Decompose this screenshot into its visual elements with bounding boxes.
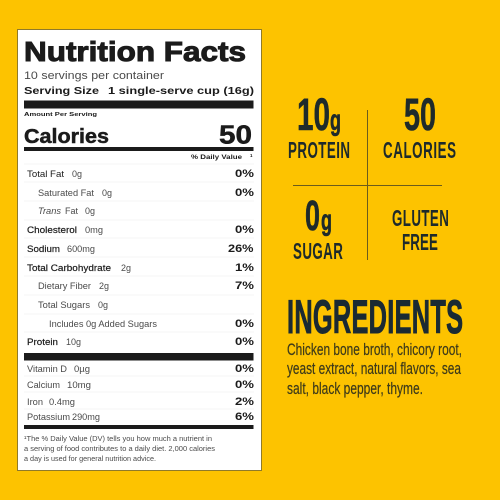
row: calcium: 0%: [235, 379, 254, 391]
footnote: a day is used for general nutrition advice.: [24, 456, 156, 463]
footnote: ¹The % Daily Value (DV) tells you how much a nutrient in: [24, 436, 212, 443]
stat: 10g protein: g: [330, 104, 341, 137]
row: protein: 10g: [66, 337, 81, 348]
row: iron: [27, 396, 254, 408]
stat: gluten free: FREE: [402, 229, 438, 255]
stat: 50 calories: [383, 89, 456, 163]
row: saturated fat: 0%: [235, 187, 254, 199]
row: cholesterol: [27, 224, 254, 236]
row: total carbohydrate: 1%: [235, 262, 254, 274]
row: total sugars: Total Sugars: [38, 300, 90, 311]
footnote: [24, 436, 216, 463]
row: added sugars: Includes 0g Added Sugars: [49, 319, 157, 330]
stat: 50 calories: 50: [404, 89, 436, 140]
row: saturated fat: 0g: [102, 188, 112, 199]
daily value header: % Daily Value: [191, 155, 243, 161]
stat: 0g sugar: g: [321, 204, 332, 237]
row: iron: 0.4mg: [49, 397, 75, 408]
stat: 0g sugar: 0: [305, 192, 320, 240]
row: total carbohydrate: [27, 262, 254, 274]
row: calcium: Calcium: [27, 380, 60, 391]
row: cholesterol: 0%: [235, 224, 254, 236]
calories row: 50: [219, 120, 252, 150]
stat: 10g protein: 10: [297, 89, 330, 140]
heading: ingredients: INGREDIENTS: [287, 292, 463, 344]
row: vitamin D: 0%: [235, 363, 254, 375]
row: calcium: [27, 379, 254, 391]
row: total fat: 0%: [235, 168, 254, 180]
row: saturated fat: [38, 187, 254, 199]
row: sodium: 600mg: [67, 244, 95, 255]
row: potassium: Potassium: [27, 412, 70, 423]
row: protein: Protein: [27, 337, 58, 348]
amount per serving: Amount Per Serving: [24, 112, 97, 118]
serving size: [24, 85, 254, 97]
row: dietary fiber: [38, 280, 254, 292]
row: saturated fat: Saturated Fat: [38, 188, 94, 199]
heading: Nutrition Facts: Nutrition Facts: [24, 36, 246, 67]
stat: gluten free: GLUTEN: [392, 205, 449, 231]
row: potassium: 6%: [235, 411, 254, 423]
row: sodium: Sodium: [27, 244, 60, 255]
stat: 10g protein: [288, 89, 350, 163]
daily value header: 1: [250, 153, 253, 158]
row: total sugars: 0g: [98, 300, 108, 311]
row: iron: 2%: [235, 396, 254, 408]
panel: nutrition facts label: [18, 30, 262, 470]
row: iron: Iron: [27, 397, 43, 408]
row: added sugars: 0%: [235, 318, 254, 330]
row: total fat: Total Fat: [27, 169, 64, 180]
row: trans fat: Trans: [38, 206, 61, 217]
row: trans fat: 0g: [85, 206, 95, 217]
row: total fat: [27, 168, 254, 180]
quadrant divider lines: [293, 110, 442, 260]
servings per container: 10 servings per container: [24, 70, 164, 82]
stat: 0g sugar: SUGAR: [293, 238, 343, 264]
row: total carbohydrate: Total Carbohydrate: [27, 263, 111, 274]
row: cholesterol: 0mg: [85, 225, 103, 236]
footnote: a serving of food contributes to a daily diet. 2,000 calories: [24, 446, 216, 453]
row: total fat: 0g: [72, 169, 82, 180]
row: sodium: 26%: [228, 243, 254, 255]
row: potassium: 290mg: [72, 412, 100, 423]
row: vitamin D: [27, 363, 254, 375]
row: trans fat: [38, 206, 95, 217]
row: total carbohydrate: 2g: [121, 263, 131, 274]
ingredients list: salt, black pepper, thyme.: [287, 379, 423, 398]
row: trans fat: Fat: [65, 206, 78, 217]
ingredients list: [287, 340, 462, 398]
row: added sugars: [49, 318, 254, 330]
row: cholesterol: Cholesterol: [27, 225, 77, 236]
row: calcium: 10mg: [67, 380, 91, 391]
serving size: Serving Size: [24, 85, 99, 97]
row: vitamin D: 0µg: [74, 364, 90, 375]
stat: 50 calories: CALORIES: [383, 137, 456, 163]
calories row: Calories: [24, 126, 109, 148]
stat: 0g sugar: [293, 192, 343, 264]
calories row: [24, 120, 252, 150]
serving size: 1 single-serve cup (16g): [108, 85, 254, 97]
daily value header: [191, 153, 253, 161]
row: dietary fiber: Dietary Fiber: [38, 281, 91, 292]
row: protein: 0%: [235, 336, 254, 348]
stat: 10g protein: PROTEIN: [288, 137, 350, 163]
row: sodium: [27, 243, 254, 255]
row: potassium: [27, 411, 254, 423]
stat: gluten free: [392, 205, 449, 255]
row: protein: [27, 336, 254, 348]
row: vitamin D: Vitamin D: [27, 364, 67, 375]
row: dietary fiber: 7%: [235, 280, 254, 292]
row: dietary fiber: 2g: [99, 281, 109, 292]
